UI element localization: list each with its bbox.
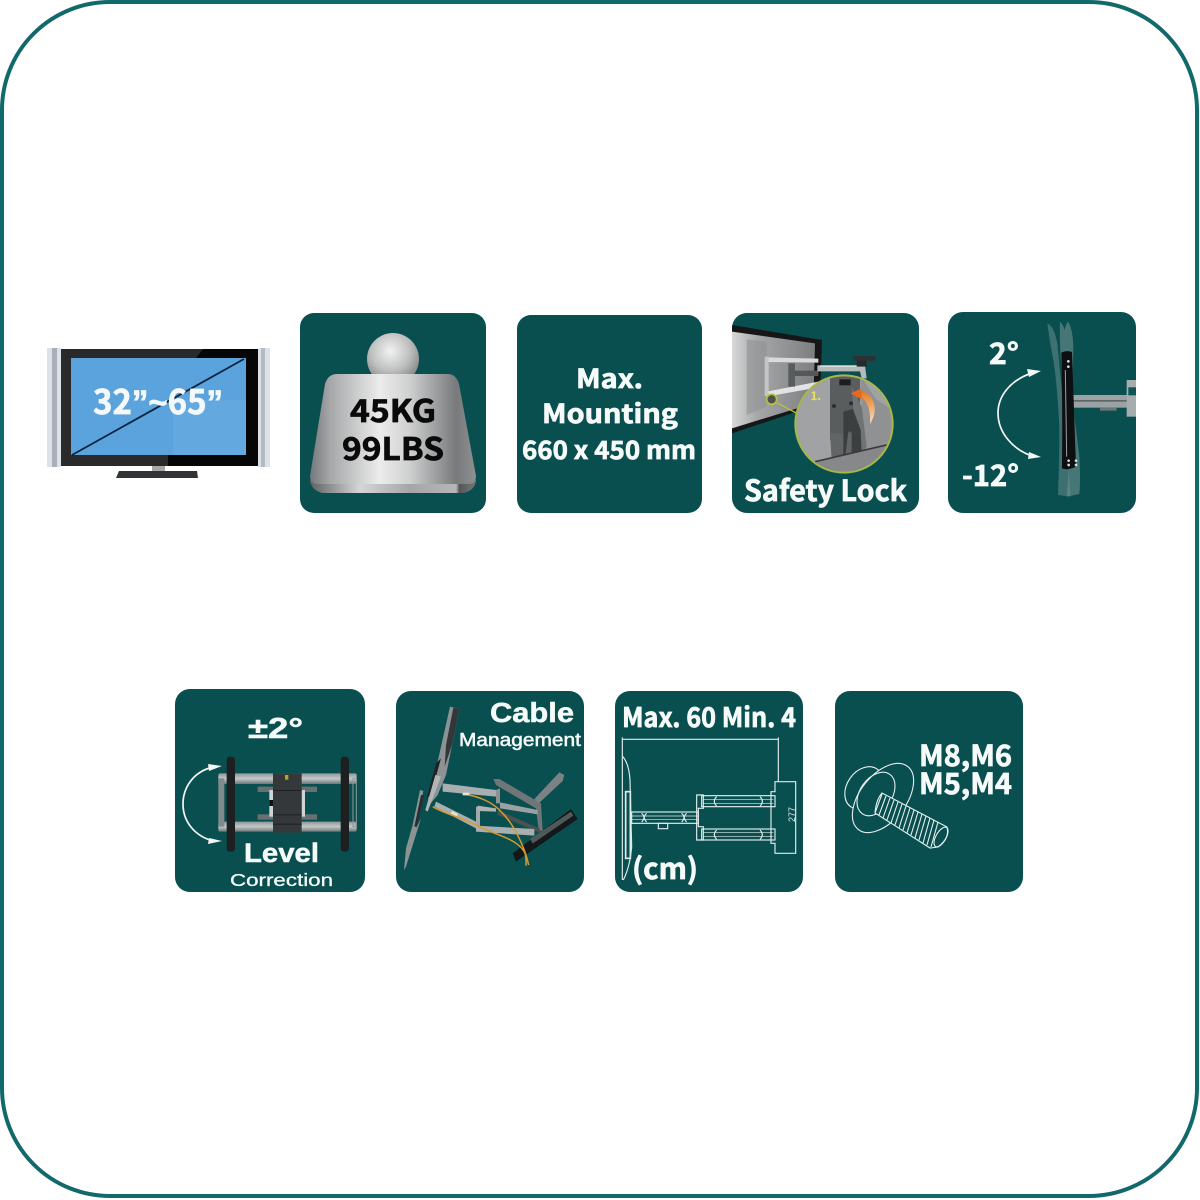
tilt labels xyxy=(962,331,1019,495)
panel: safety lock xyxy=(732,313,919,513)
panel: cable management xyxy=(396,691,584,892)
screw size label: M5,M4 xyxy=(919,761,1012,803)
icon: bolt outline xyxy=(837,752,951,849)
icon: wall plate front xyxy=(218,757,357,852)
mounting text: Mounting xyxy=(542,394,679,431)
weight label: 45KG xyxy=(350,386,436,431)
icon: television 32 to 65 inches xyxy=(47,348,270,478)
icon: tv back with bracket xyxy=(732,325,875,433)
level adjust label: ±2° xyxy=(248,713,303,745)
icon: arm dimension line drawing xyxy=(622,737,796,880)
panel: tilt range xyxy=(948,312,1136,513)
mounting text xyxy=(522,359,696,467)
mounting text: 660 x 450 mm xyxy=(522,431,696,467)
panel: weight capacity xyxy=(300,313,486,513)
screw size label xyxy=(919,733,1012,803)
cable label xyxy=(459,697,581,750)
icon: level arrow xyxy=(183,764,222,844)
panel: level correction xyxy=(175,689,365,892)
panel: screw sizes xyxy=(835,691,1023,892)
safety lock label: Safety Lock xyxy=(744,468,907,510)
tv size label: 32”~65” xyxy=(93,375,223,424)
cable label: Management xyxy=(459,730,581,750)
icon: magnified lock: 1. xyxy=(811,388,821,404)
level correction label: Correction xyxy=(230,870,333,890)
icon: tilt arrow xyxy=(998,369,1041,459)
dimension value: 277 xyxy=(787,807,797,822)
icon: magnified lock xyxy=(795,373,897,477)
weight label: 99LBS xyxy=(342,424,444,469)
unit label: (cm) xyxy=(632,846,698,888)
level correction label: Level xyxy=(244,838,319,868)
icon: articulated arm with cables xyxy=(404,707,578,870)
weight label xyxy=(342,386,444,469)
extension label: Max. 60 Min. 4 xyxy=(622,696,796,735)
cable label: Cable xyxy=(490,697,574,728)
screw size label: M8,M6 xyxy=(919,733,1012,775)
tilt labels: 2° xyxy=(989,331,1019,373)
icon: tilting mount xyxy=(1047,322,1136,497)
icon: weight xyxy=(310,333,476,493)
mounting text: Max. xyxy=(576,359,643,396)
panel: max mounting xyxy=(517,315,702,513)
tilt labels: -12° xyxy=(962,453,1019,495)
panel: extension distance xyxy=(615,691,803,892)
level correction label xyxy=(230,838,333,890)
